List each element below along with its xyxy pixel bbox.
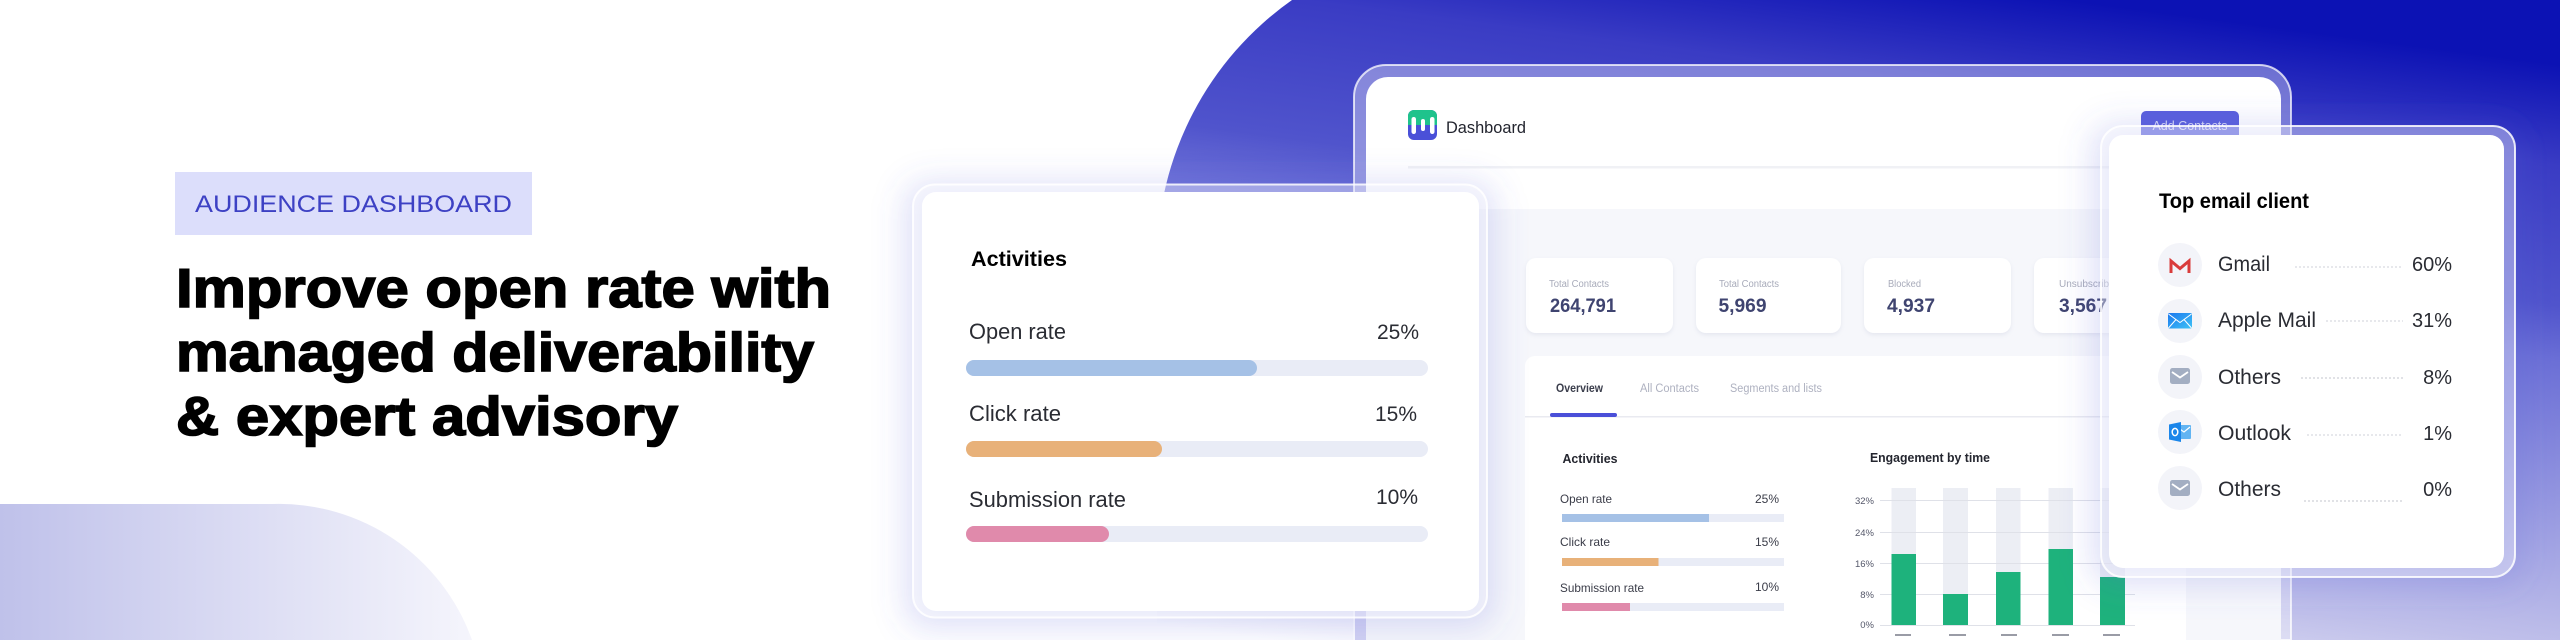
tabs (1525, 383, 2109, 418)
row: open rate (966, 319, 1428, 376)
mini activities (1560, 452, 1784, 611)
row: others: Others (2218, 366, 2281, 389)
stat card: blocked: Blocked (1888, 279, 1921, 290)
row: open rate: Open rate (969, 319, 1066, 344)
panel: dashboard window (905, 65, 2522, 640)
dashboard white body (1366, 77, 2281, 640)
row: submission rate: Submission rate (969, 487, 1126, 512)
tag: audience dashboard (175, 172, 532, 235)
header divider (1408, 166, 2100, 168)
row: outlook: Outlook (2218, 422, 2292, 445)
stat card: blocked: 4,937 (1887, 296, 1935, 317)
stat card: total contacts (1526, 258, 1673, 335)
heading: managed deliverability (176, 321, 814, 383)
row: apple mail: 31% (2412, 310, 2452, 332)
row: outlook (2158, 410, 2452, 454)
row: click rate (966, 401, 1428, 457)
stat card: total contacts: Total Contacts (1549, 279, 1609, 290)
mini activities: Click rate (1560, 535, 1610, 549)
shadow: email client card (2092, 124, 2522, 586)
stat card: unsubscribed: 3,567 (2059, 296, 2107, 317)
frame tint strip (1355, 600, 1366, 640)
mini activities: 25% (1755, 492, 1779, 506)
stat card: total contacts 2: 5,969 (1718, 296, 1766, 317)
chart: engagement by time: 32% (1855, 496, 1875, 507)
row: gmail (2158, 243, 2452, 287)
row: outlook: 1% (2423, 423, 2452, 445)
chart: engagement by time: 16% (1855, 559, 1875, 570)
heading (176, 257, 831, 447)
stat card: total contacts 2 (1696, 258, 1841, 335)
dashboard content (1366, 110, 2281, 640)
logo (1408, 110, 1437, 140)
chart: engagement by time: Engagement by time (1870, 451, 1990, 465)
row: others (2158, 355, 2452, 399)
row: others 2 (2158, 466, 2452, 510)
add contacts button (2141, 111, 2239, 135)
chart: engagement by time: 8% (1860, 590, 1875, 601)
row: submission rate (966, 486, 1428, 542)
chart: engagement by time (1855, 451, 2135, 636)
chart: engagement by time: 24% (1855, 528, 1875, 539)
row: submission rate: 10% (1376, 486, 1418, 509)
mini activities: Open rate (1560, 492, 1612, 506)
heading: Improve open rate with (176, 257, 831, 319)
activities white body (922, 192, 1479, 611)
row: click rate: Click rate (969, 401, 1061, 426)
chart: engagement by time: 0% (1860, 620, 1875, 631)
dashboard title: Dashboard (1446, 118, 1526, 137)
panel: activities card (913, 184, 1487, 618)
gray content area (1366, 209, 2281, 640)
tag: audience dashboard: AUDIENCE DASHBOARD (195, 191, 512, 218)
tabs: All Contacts (1640, 383, 1699, 395)
stat card: total contacts: 264,791 (1550, 296, 1616, 317)
content panel (1525, 356, 2186, 640)
row: gmail: 60% (2412, 254, 2452, 276)
email title: Top email client (2159, 190, 2309, 213)
activities title: Activities (971, 248, 1067, 271)
background: lavender corner shape (0, 504, 472, 640)
row: apple mail (2158, 299, 2452, 343)
mini activities: 10% (1755, 580, 1779, 594)
panel: top email client card (2101, 126, 2515, 577)
row: open rate: 25% (1377, 321, 1419, 344)
email glass frame (2101, 126, 2515, 577)
row: gmail: Gmail (2218, 253, 2270, 276)
activities glass frame (913, 184, 1487, 618)
mini activities: 15% (1755, 535, 1779, 549)
row: others 2: Others (2218, 478, 2281, 501)
stat card: unsubscribed: Unsubscribed (2059, 279, 2120, 290)
dashboard glass frame (1354, 65, 2291, 640)
row: click rate: 15% (1375, 403, 1417, 426)
tabs: Overview (1556, 383, 1603, 395)
mini activities: Submission rate (1560, 581, 1644, 595)
row: others 2: 0% (2423, 479, 2452, 501)
stat card: blocked (1864, 258, 2011, 335)
stat card: unsubscribed (2034, 258, 2108, 335)
email white body (2109, 135, 2504, 568)
shadow: activities card (905, 182, 1495, 628)
heading: & expert advisory (176, 385, 678, 447)
stat card: total contacts 2: Total Contacts (1719, 279, 1779, 290)
row: others: 8% (2423, 367, 2452, 389)
background: gradient blue shape (1157, 0, 2560, 640)
row: apple mail: Apple Mail (2218, 309, 2316, 332)
add contacts button: Add Contacts (2152, 119, 2228, 133)
tabs: Segments and lists (1730, 383, 1822, 395)
mini activities: Activities (1562, 452, 1618, 466)
